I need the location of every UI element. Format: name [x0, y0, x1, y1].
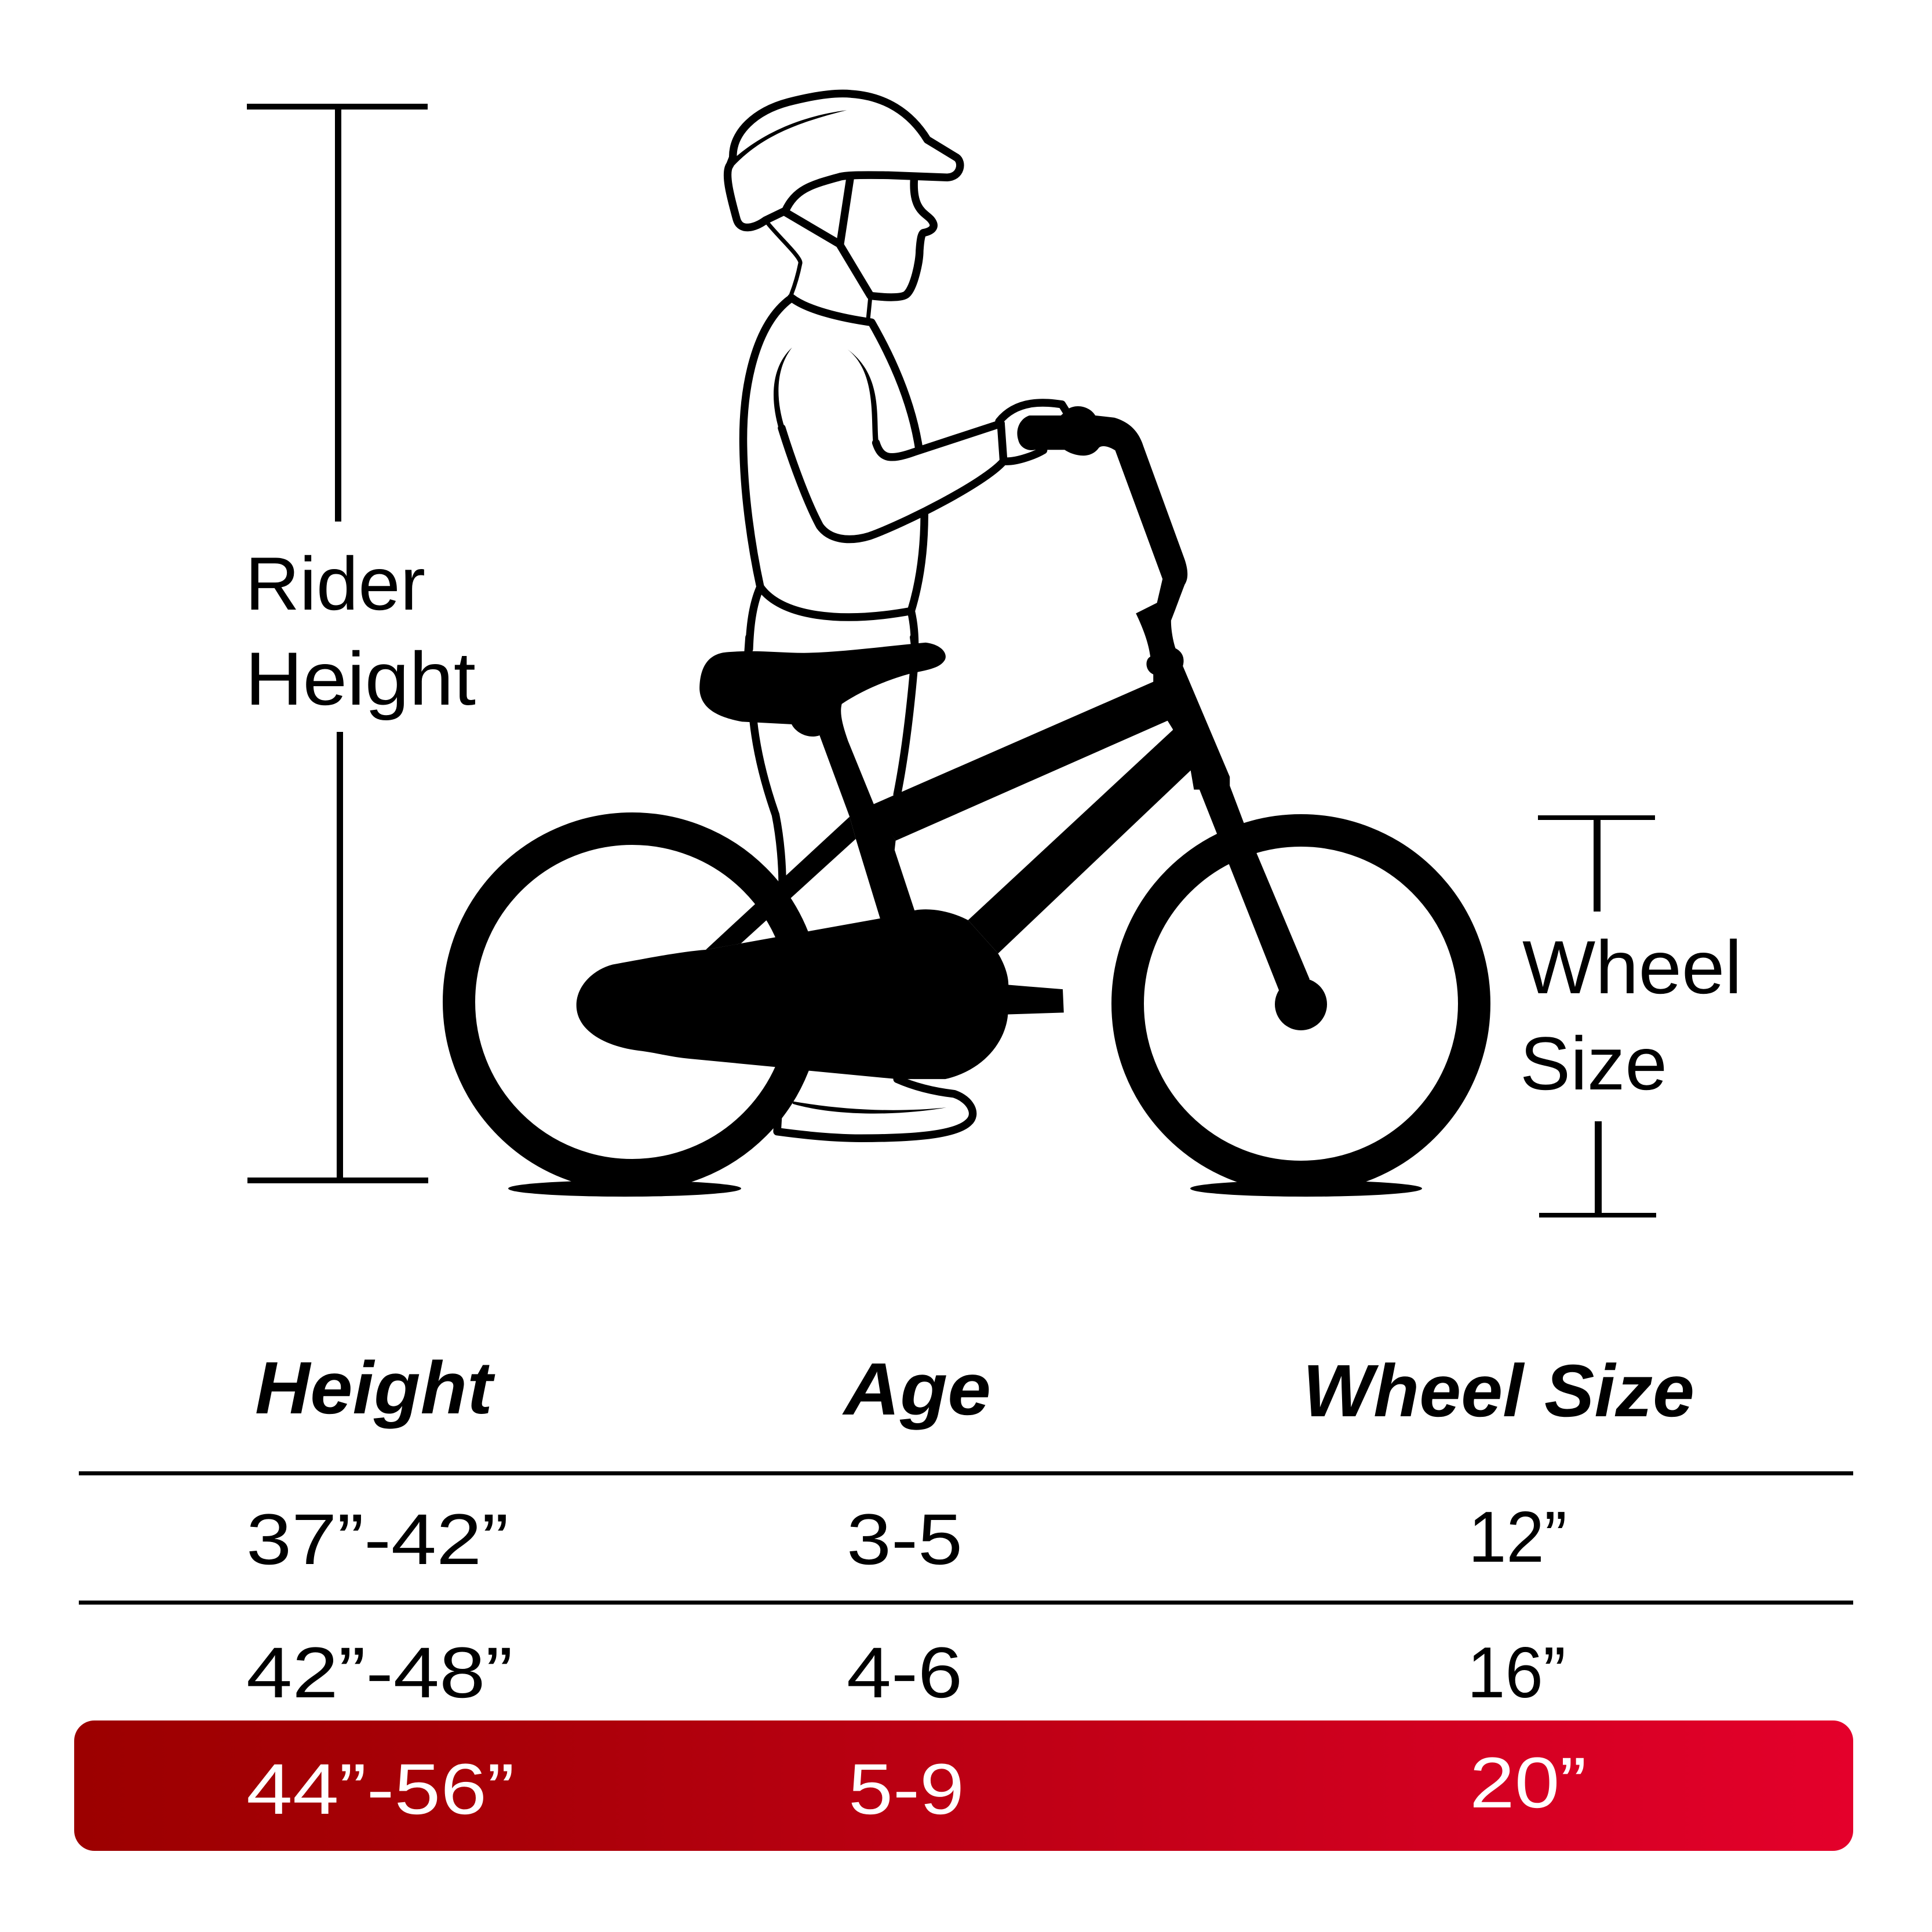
shoe [777, 1079, 973, 1138]
dimension: wheel size [1538, 815, 1656, 1217]
illustration: rider legs and shoe [748, 637, 973, 1138]
row 2 [246, 1633, 1566, 1713]
illustration: handlebar, stem and fork [1017, 406, 1310, 990]
seat stay [706, 816, 856, 950]
dimension: rider height [247, 104, 428, 1183]
row 1: 12” [1468, 1497, 1567, 1577]
chain guard [577, 909, 1064, 1079]
row 1: 37”-42” [246, 1500, 509, 1580]
rear wheel ground shadow [508, 1180, 741, 1197]
front wheel ground shadow [1190, 1180, 1422, 1197]
top tube [873, 678, 1197, 841]
sleeve shoulder creases [774, 348, 879, 444]
saddle [699, 643, 946, 737]
row 1 [246, 1497, 1567, 1580]
front hub [1275, 978, 1327, 1030]
row 3: highlighted: 5-9 [848, 1749, 964, 1829]
label: wheel: Wheel [1522, 925, 1742, 1009]
label: rider: Rider [245, 541, 425, 626]
row 3: highlighted [74, 1720, 1853, 1851]
torso outline [743, 298, 924, 649]
table header: height: Height [255, 1347, 495, 1430]
row 2: 42”-48” [246, 1633, 513, 1713]
row 1: 3-5 [847, 1500, 963, 1580]
table header: age: Age [842, 1348, 991, 1431]
strap and face [785, 178, 934, 297]
helmet [728, 93, 960, 228]
label: height: Height [245, 636, 476, 721]
seat tube [819, 704, 916, 920]
row 2: 4-6 [847, 1633, 963, 1713]
down tube [968, 730, 1197, 953]
neck [767, 222, 870, 318]
hand [999, 403, 1067, 461]
row 3: highlighted: 20” [1470, 1743, 1587, 1823]
arm [782, 424, 1004, 539]
table header: wheel size: Wheel Size [1303, 1350, 1694, 1432]
row 2: 16” [1467, 1633, 1566, 1713]
front wheel [1128, 830, 1474, 1177]
illustration: bike frame, chain guard and saddle [577, 643, 1197, 1079]
helmet swoosh [732, 110, 847, 167]
shoe swoosh [793, 1101, 946, 1114]
illustration: rider upper body [728, 93, 1067, 649]
rear wheel [459, 829, 805, 1175]
row 3: highlighted: 44”-56” [246, 1749, 515, 1829]
label: size: Size [1520, 1021, 1667, 1106]
